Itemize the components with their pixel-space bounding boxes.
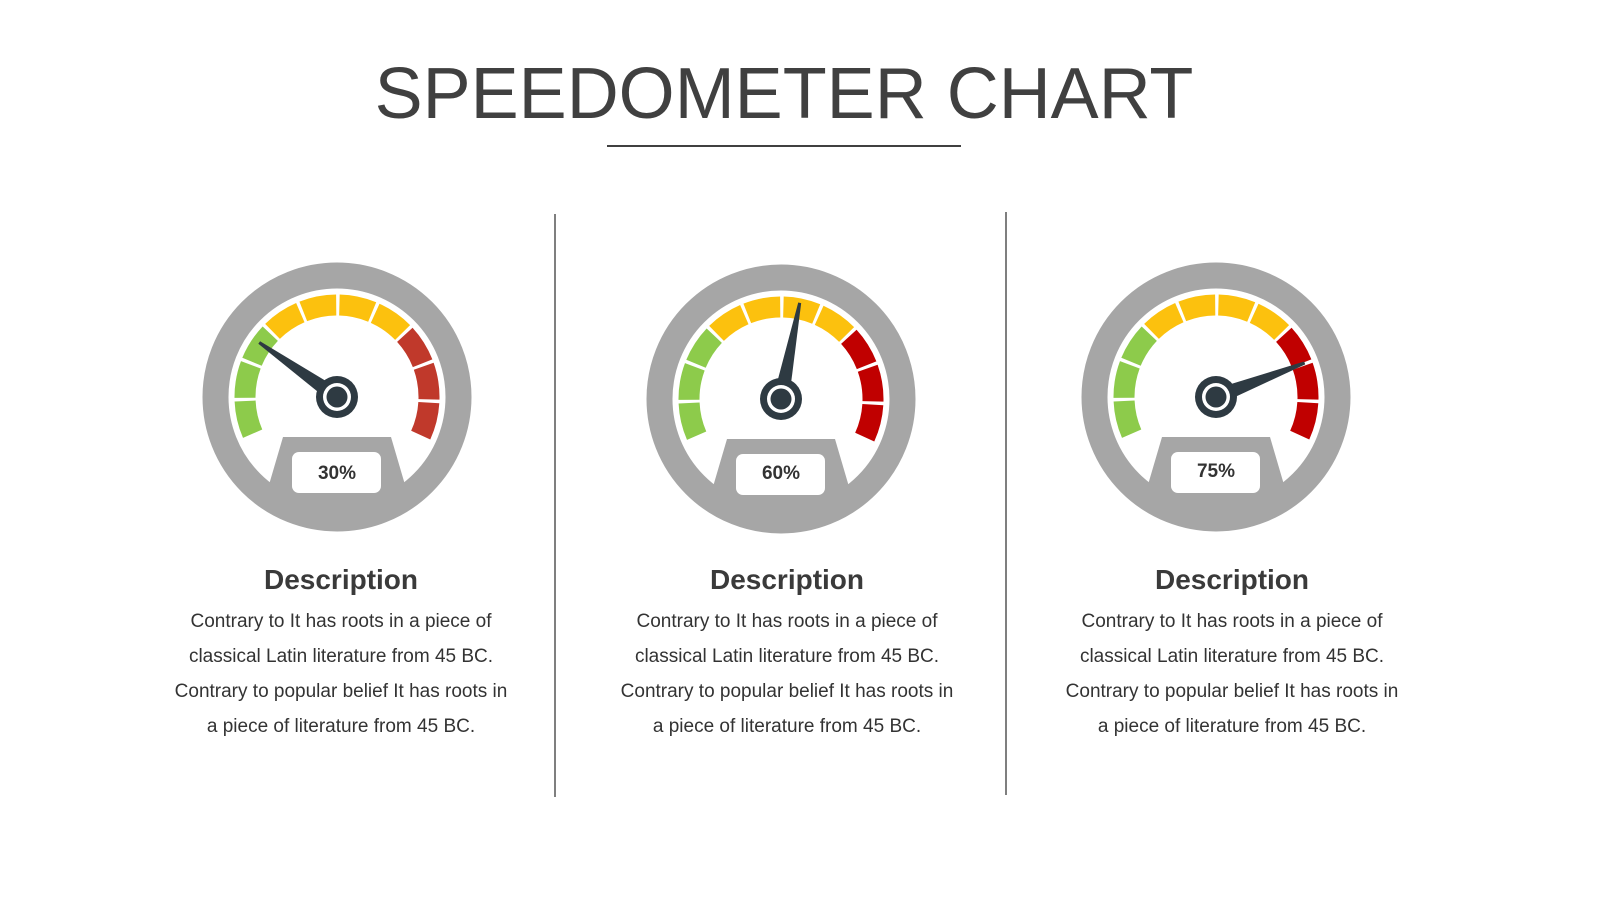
label: 60% [762, 463, 800, 484]
gauge: 75% [1094, 276, 1338, 518]
description 3 [1066, 564, 1398, 737]
needle [1213, 355, 1308, 404]
description 1: a piece of literature from 45 BC. [207, 716, 475, 737]
gauge: 60% [660, 278, 902, 520]
description 3: Contrary to popular belief It has roots in [1066, 681, 1398, 702]
description 2 [621, 564, 953, 737]
description 1: Contrary to It has roots in a piece of [190, 611, 492, 632]
description 2: Contrary to It has roots in a piece of [636, 611, 938, 632]
description 2: Contrary to popular belief It has roots in [621, 681, 953, 702]
description 2: classical Latin literature from 45 BC. [635, 646, 939, 667]
label: 75% [1197, 461, 1235, 482]
description 1: Description [264, 564, 418, 595]
description 1 [175, 564, 507, 737]
title: SPEEDOMETER CHART [375, 54, 1193, 134]
description 1: Contrary to popular belief It has roots in [175, 681, 507, 702]
description 3: Contrary to It has roots in a piece of [1082, 611, 1383, 632]
needle [255, 336, 342, 404]
needle [773, 301, 808, 401]
label: 30% [318, 463, 356, 484]
description 3: a piece of literature from 45 BC. [1098, 716, 1366, 737]
gauge: 30% [216, 276, 458, 518]
description 1: classical Latin literature from 45 BC. [189, 646, 493, 667]
description 3: classical Latin literature from 45 BC. [1080, 646, 1384, 667]
description 2: Description [710, 564, 864, 595]
description 2: a piece of literature from 45 BC. [653, 716, 921, 737]
description 3: Description [1155, 564, 1309, 595]
